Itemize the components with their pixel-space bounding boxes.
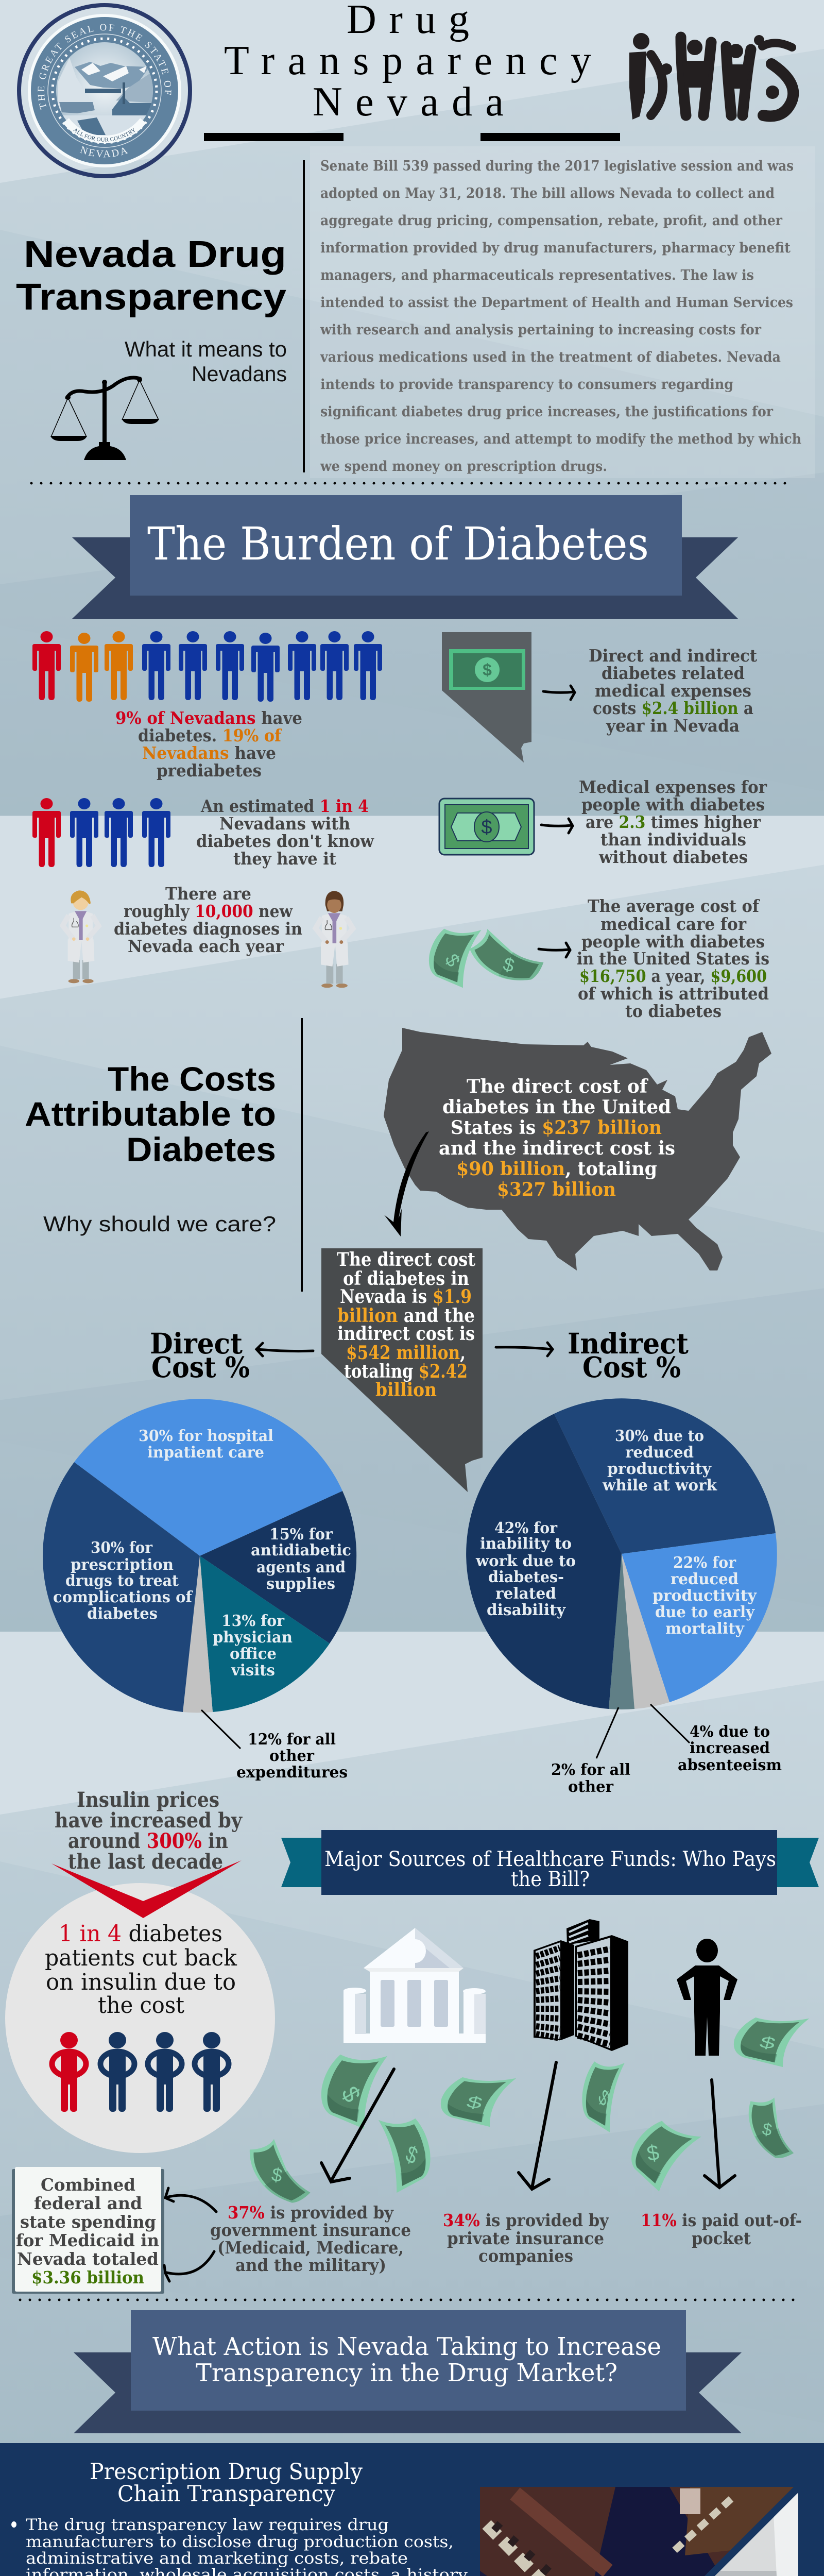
- subheading: [125, 337, 287, 386]
- text: new diagnoses: diabetes diagnoses in: [114, 919, 302, 939]
- heading: costs: Attributable to: [25, 1095, 276, 1133]
- text: undiagnosed: [196, 796, 374, 869]
- icon: person: [677, 1939, 737, 2056]
- arrow: curved down: [164, 2251, 214, 2281]
- icon: DHHS logo: [629, 33, 793, 120]
- text: expenses 2.3 times: than individuals: [600, 829, 746, 850]
- icon: doctor left: [63, 890, 99, 983]
- chart: direct cost pie: physician: [213, 1629, 293, 1647]
- panel: senate bill summary: aggregate drug pricing, compensation, rebate, profit, and other: [320, 213, 783, 229]
- icon: Nevada state seal: [17, 3, 192, 178]
- chart: indirect cost pie: due to early: [655, 1603, 756, 1621]
- chart: indirect cost pie: productivity: [653, 1587, 758, 1605]
- map: United States: $327 billion: [497, 1179, 616, 1200]
- chart: direct cost pie: visits: [231, 1662, 275, 1680]
- text: undiagnosed: An estimated 1 in 4: [200, 796, 369, 816]
- text: new diagnoses: There are: [165, 884, 251, 904]
- text: average cost: people with diabetes: [581, 931, 765, 952]
- text: 11 percent: pocket: [692, 2228, 751, 2248]
- banner: The Burden of Diabetes: [72, 495, 738, 619]
- chart: direct cost pie: 15% for: [269, 1526, 333, 1544]
- arrow: [496, 1343, 553, 1356]
- arrow: [256, 1343, 313, 1356]
- callout: Medicaid spending: for Medicaid in: [16, 2230, 159, 2250]
- text: 11 percent: [641, 2210, 802, 2248]
- text: 11 percent: 11% is paid out-of-: [641, 2210, 802, 2230]
- text: average cost: of which is attributed: [578, 984, 769, 1004]
- chart: direct cost pie: [43, 1399, 356, 1713]
- arrow: US to Nevada: [384, 1131, 429, 1236]
- chart: indirect cost pie: work due to: [475, 1552, 576, 1570]
- bullet list: [11, 2516, 468, 2576]
- heading: Nevada Drug Transparency: Transparency: [16, 277, 286, 318]
- map: Nevada costs: of diabetes in: [343, 1268, 469, 1290]
- callout: 2%: other: [568, 1778, 614, 1796]
- callout: 12%: expenditures: [236, 1764, 348, 1782]
- callout: 4%: 4% due to: [690, 1723, 770, 1741]
- text: average cost: in the United States is: [577, 948, 769, 969]
- icon: falling banknotes: $: [465, 2093, 485, 2112]
- chart: direct cost pie: 30% for hospital: [139, 1427, 273, 1445]
- chart: direct cost pie: agents and: [256, 1558, 346, 1577]
- map: Nevada costs: totaling $2.42: [344, 1361, 468, 1382]
- panel: senate bill summary: significant diabetes drug price increases, the justifications for: [320, 404, 774, 420]
- heading: [90, 2459, 363, 2507]
- arrow: government: [321, 2069, 394, 2182]
- chart: direct cost pie: prescription: [71, 1556, 174, 1574]
- heading: costs: [25, 1060, 276, 1168]
- heading: Nevada Drug Transparency: Nevada Drug: [24, 234, 286, 275]
- text: expenses 2.3 times: Medical expenses for: [579, 777, 767, 797]
- photo: legislature chamber: [480, 2487, 799, 2576]
- bullet list: administrative and marketing costs, rebate: [26, 2549, 408, 2568]
- vertical divider: [301, 1018, 303, 1292]
- chart: indirect cost pie: reduced: [671, 1570, 739, 1588]
- text: average cost: medical care for: [600, 914, 747, 934]
- chart: direct cost pie: drugs to treat: [65, 1572, 179, 1590]
- icon: red chevron: [52, 1860, 242, 1918]
- pictogram: people: [52, 2032, 229, 2112]
- icon: falling banknotes: $: [403, 2140, 421, 2170]
- map: United States: The direct cost of: [467, 1076, 648, 1097]
- heading: Prescription Drug Supply: [90, 2459, 363, 2485]
- chart: indirect cost pie: 42% for: [494, 1519, 558, 1537]
- icon: scales: [50, 377, 159, 460]
- icon: falling banknotes: $: [761, 2119, 774, 2140]
- heading: costs: Diabetes: [126, 1130, 276, 1168]
- subheading: Why should we care?: [43, 1212, 276, 1236]
- chart: indirect cost pie: inability to: [480, 1535, 572, 1553]
- chart: indirect cost pie: while at work: [602, 1477, 717, 1495]
- panel: senate bill summary: various medications used in the treatment of diabetes. Nevada: [320, 349, 781, 365]
- title: Transparency: [224, 38, 591, 83]
- map: Nevada costs: indirect cost is: [337, 1323, 475, 1345]
- panel: senate bill summary: [310, 146, 815, 478]
- callout circle: insulin: the cost: [98, 1992, 184, 2019]
- chart: indirect cost pie: related: [495, 1585, 556, 1603]
- callout circle: insulin: patients cut back: [45, 1945, 237, 1971]
- chart: direct cost pie: office: [230, 1645, 277, 1663]
- map: Nevada costs: billion: [375, 1379, 437, 1401]
- heading: Indirect Cost: Cost %: [582, 1350, 681, 1384]
- text: 37 percent: [210, 2202, 411, 2275]
- banner: What Action: Transparency in the Drug Market?: [196, 2359, 617, 2387]
- chart: indirect cost pie: mortality: [665, 1620, 745, 1638]
- pictogram: four people: [32, 798, 170, 867]
- callout: 12%: other: [269, 1747, 315, 1765]
- callout: Medicaid spending: Nevada totaled: [17, 2249, 159, 2269]
- text: expenses 2.3 times: are 2.3 times higher: [586, 812, 761, 832]
- text: insulin prices: have increased by: [55, 1808, 243, 1833]
- text: new diagnoses: [114, 884, 302, 956]
- icon: banknote: [439, 799, 534, 855]
- text: total expenses: costs $2.4 billion a: [593, 698, 753, 718]
- text: insulin prices: [55, 1788, 243, 1874]
- chart: direct cost pie: diabetes: [87, 1605, 158, 1623]
- callout circle: insulin: 1 in 4 diabetes: [59, 1921, 222, 1947]
- callout: 12%: 12% for all: [248, 1731, 336, 1749]
- text: prevalence: [115, 708, 302, 781]
- text: 34 percent: companies: [478, 2246, 573, 2266]
- map: United States: $90 billion, totaling: [456, 1158, 657, 1180]
- map: Nevada costs: The direct cost: [337, 1249, 475, 1270]
- text: average cost: to diabetes: [625, 1001, 722, 1021]
- heading: Direct Cost: Direct: [150, 1327, 243, 1360]
- map: Nevada costs: billion and the: [337, 1305, 475, 1327]
- map: United States: States is $237 billion: [451, 1117, 662, 1139]
- banner: The Burden of Diabetes: The Burden of Diabetes: [147, 517, 649, 570]
- text: average cost: [577, 896, 769, 1021]
- icon: office buildings: [534, 1919, 628, 2051]
- icon: falling banknotes: $: [270, 2163, 284, 2186]
- icon: banknote: $: [481, 817, 492, 838]
- arrow: private insurance: [519, 2062, 556, 2189]
- map: United States: and the indirect cost is: [439, 1138, 675, 1159]
- text: 34 percent: private insurance: [447, 2228, 604, 2248]
- text: insulin prices: around 300% in: [68, 1829, 228, 1853]
- text: undiagnosed: diabetes don't know: [196, 831, 374, 851]
- text: total expenses: [589, 646, 758, 736]
- icon: flying banknotes: $: [441, 951, 465, 970]
- icon: flying banknotes: [429, 929, 543, 988]
- text: expenses 2.3 times: without diabetes: [598, 847, 748, 867]
- chart: direct cost pie: 13% for: [221, 1612, 285, 1630]
- heading: costs: The Costs: [108, 1060, 276, 1098]
- text: insulin prices: Insulin prices: [77, 1788, 219, 1812]
- banner: What Action: [74, 2310, 742, 2433]
- bullet list: manufacturers to disclose drug production costs,: [26, 2533, 454, 2551]
- banner: who pays the bill: Major Sources of Healthcare Funds: Who Pays: [324, 1848, 776, 1871]
- icon: Nevada with banknote: $: [483, 660, 492, 679]
- text: 37 percent: and the military): [235, 2255, 386, 2275]
- text: prevalence: 9% of Nevadans have: [115, 708, 302, 728]
- panel: senate bill summary: intends to provide transparency to consumers regarding: [320, 377, 733, 393]
- subheading: What it means to: [125, 337, 287, 361]
- pictogram: ten people: [32, 631, 382, 702]
- chart: indirect cost pie: productivity: [607, 1460, 712, 1478]
- map: Nevada costs: [321, 1248, 483, 1492]
- chart: indirect cost pie: 22% for: [673, 1554, 736, 1572]
- icon: falling banknotes: $: [336, 2081, 366, 2107]
- text: undiagnosed: they have it: [233, 849, 337, 869]
- chart: indirect cost pie: reduced: [625, 1444, 694, 1462]
- panel: senate bill summary: adopted on May 31, 2018. The bill allows Nevada to collect and: [320, 185, 775, 201]
- callout: 4%: absenteeism: [678, 1756, 782, 1774]
- text: total expenses: medical expenses: [595, 681, 751, 701]
- callout: 2%: 2% for all: [551, 1761, 630, 1779]
- banner: What Action: What Action is Nevada Taking to Increase: [152, 2332, 661, 2361]
- chart: indirect cost pie: [466, 1398, 777, 1709]
- chart: direct cost pie: 30% for: [91, 1539, 153, 1557]
- callout circle: insulin: on insulin due to: [46, 1969, 236, 1995]
- panel: senate bill summary: information provided by drug manufacturers, pharmacy benefit: [320, 240, 791, 256]
- chart: direct cost pie: complications of: [53, 1588, 193, 1606]
- chart: direct cost pie: supplies: [266, 1575, 335, 1593]
- vertical divider: [303, 160, 305, 472]
- callout: 4%: [650, 1704, 782, 1774]
- icon: Nevada state seal: NEVADA: [79, 146, 128, 158]
- icon: flying banknotes: $: [501, 953, 517, 976]
- callout: Medicaid spending: [12, 2167, 164, 2294]
- panel: senate bill summary: intended to assist the Department of Health and Human Services: [320, 295, 793, 311]
- heading: Direct Cost: [150, 1327, 250, 1384]
- arrow: out of pocket: [705, 2080, 735, 2188]
- callout: 2%: [551, 1707, 630, 1796]
- text: 37 percent: 37% is provided by: [228, 2202, 394, 2223]
- text: insulin prices: the last decade: [68, 1850, 223, 1874]
- panel: senate bill summary: with research and analysis pertaining to increasing costs for: [320, 322, 762, 338]
- callout circle: insulin: [5, 1883, 275, 2153]
- callout: Medicaid spending: federal and: [34, 2193, 142, 2213]
- icon: Nevada with banknote: [442, 632, 531, 762]
- text: 34 percent: 34% is provided by: [443, 2210, 609, 2230]
- panel: senate bill summary: managers, and pharmaceuticals representatives. The law is: [320, 267, 754, 283]
- heading: Chain Transparency: [117, 2481, 336, 2507]
- banner: who pays the bill: [281, 1830, 819, 1895]
- chart: direct cost pie: inpatient care: [147, 1444, 264, 1462]
- icon: falling banknotes: $: [758, 2033, 778, 2053]
- callout: 12%: [201, 1710, 348, 1782]
- text: prevalence: prediabetes: [157, 760, 262, 781]
- text: new diagnoses: Nevada each year: [128, 936, 284, 956]
- heading: Direct Cost: Cost %: [151, 1350, 250, 1384]
- panel: senate bill summary: those price increases, and attempt to modify the method by which: [320, 431, 801, 447]
- icon: doctor right: [316, 891, 353, 988]
- bullet list: The drug transparency law requires drug: [26, 2516, 389, 2534]
- text: average cost: $16,750 a year, $9,600: [579, 966, 767, 986]
- callout: Medicaid spending: state spending: [20, 2212, 156, 2232]
- text: 34 percent: [443, 2210, 609, 2266]
- arrow: curved up: [165, 2188, 216, 2212]
- text: undiagnosed: Nevadans with: [219, 814, 350, 834]
- callout: 4%: increased: [690, 1739, 770, 1757]
- photo: laboratory: [715, 2493, 798, 2576]
- text: total expenses: diabetes related: [602, 663, 745, 683]
- heading: Indirect Cost: [568, 1327, 689, 1384]
- text: new diagnoses: roughly 10,000 new: [124, 901, 293, 921]
- map: United States: [384, 1028, 771, 1270]
- panel: prescription drug supply chain: [0, 2443, 824, 2576]
- icon: Nevada state seal: THE GREAT SEAL OF THE STATE OF: [38, 24, 171, 110]
- text: expenses 2.3 times: people with diabetes: [581, 794, 765, 815]
- heading: Nevada Drug Transparency: [16, 234, 286, 318]
- subheading: Nevadans: [192, 362, 287, 386]
- text: total expenses: year in Nevada: [606, 716, 740, 736]
- map: United States: diabetes in the United: [442, 1096, 671, 1118]
- text: expenses 2.3 times: [579, 777, 767, 867]
- title: [224, 0, 591, 125]
- panel: senate bill summary: we spend money on prescription drugs.: [320, 459, 607, 474]
- title: Nevada: [313, 79, 504, 125]
- icon: falling banknotes: $: [595, 2084, 613, 2111]
- callout: Medicaid spending: Combined: [41, 2175, 135, 2195]
- text: prevalence: Nevadans have: [142, 743, 276, 763]
- text: prevalence: diabetes. 19% of: [138, 725, 282, 745]
- text: total expenses: Direct and indirect: [589, 646, 758, 666]
- chart: indirect cost pie: diabetes-: [488, 1568, 564, 1586]
- chart: indirect cost pie: disability: [487, 1601, 566, 1619]
- text: 37 percent: government insurance: [210, 2220, 411, 2240]
- icon: falling banknotes: [236, 2018, 813, 2209]
- arrow: [541, 819, 573, 833]
- banner: who pays the bill: the Bill?: [511, 1868, 590, 1891]
- map: Nevada costs: Nevada is $1.9: [340, 1286, 472, 1308]
- icon: falling banknotes: $: [645, 2140, 661, 2166]
- text: 37 percent: (Medicaid, Medicare,: [217, 2238, 404, 2258]
- heading: Indirect Cost: Indirect: [568, 1327, 689, 1360]
- map: Nevada costs: $542 million,: [346, 1342, 466, 1364]
- title underline bars: [204, 133, 620, 141]
- chart: direct cost pie: antidiabetic: [251, 1541, 351, 1560]
- callout: Medicaid spending: $3.36 billion: [31, 2267, 144, 2287]
- arrow: [539, 943, 570, 957]
- arrow: [543, 686, 575, 700]
- icon: government building: [344, 1928, 486, 2043]
- chart: indirect cost pie: 30% due to: [615, 1427, 704, 1445]
- icon: Nevada state seal: ALL FOR OUR COUNTRY: [73, 128, 135, 142]
- text: average cost: The average cost of: [588, 896, 760, 916]
